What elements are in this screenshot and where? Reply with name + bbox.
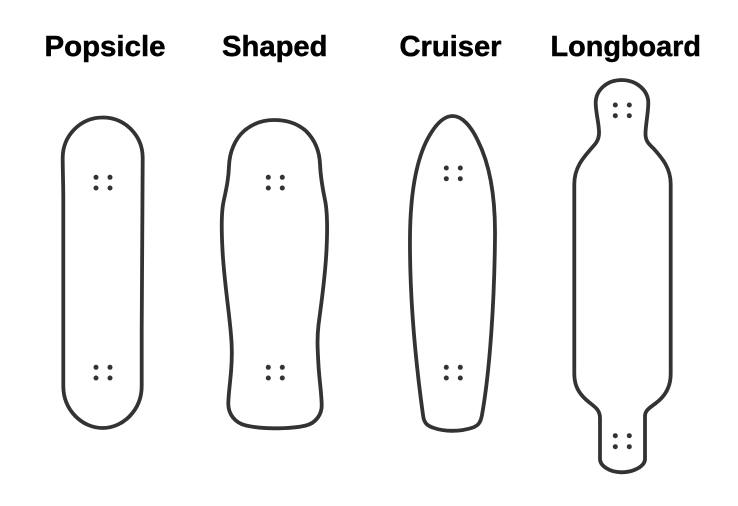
deck outline: popsicle [63, 118, 143, 428]
heading: Shaped: Shaped [222, 31, 328, 63]
deck outline: cruiser [410, 116, 495, 431]
panel: longboard [550, 31, 701, 472]
deck outline: longboard [574, 80, 671, 472]
heading: Cruiser: Cruiser [400, 31, 502, 63]
deck outline: shaped [222, 120, 327, 428]
panel: cruiser [400, 31, 502, 431]
truck holes: cruiser [444, 166, 463, 380]
truck holes: shaped [266, 175, 285, 380]
heading: Popsicle: Popsicle [44, 31, 166, 63]
truck holes: popsicle [94, 175, 112, 380]
panel: popsicle [44, 31, 166, 428]
heading: Longboard: Longboard [550, 31, 701, 63]
panel: shaped [222, 31, 328, 428]
truck holes: longboard [613, 102, 632, 449]
